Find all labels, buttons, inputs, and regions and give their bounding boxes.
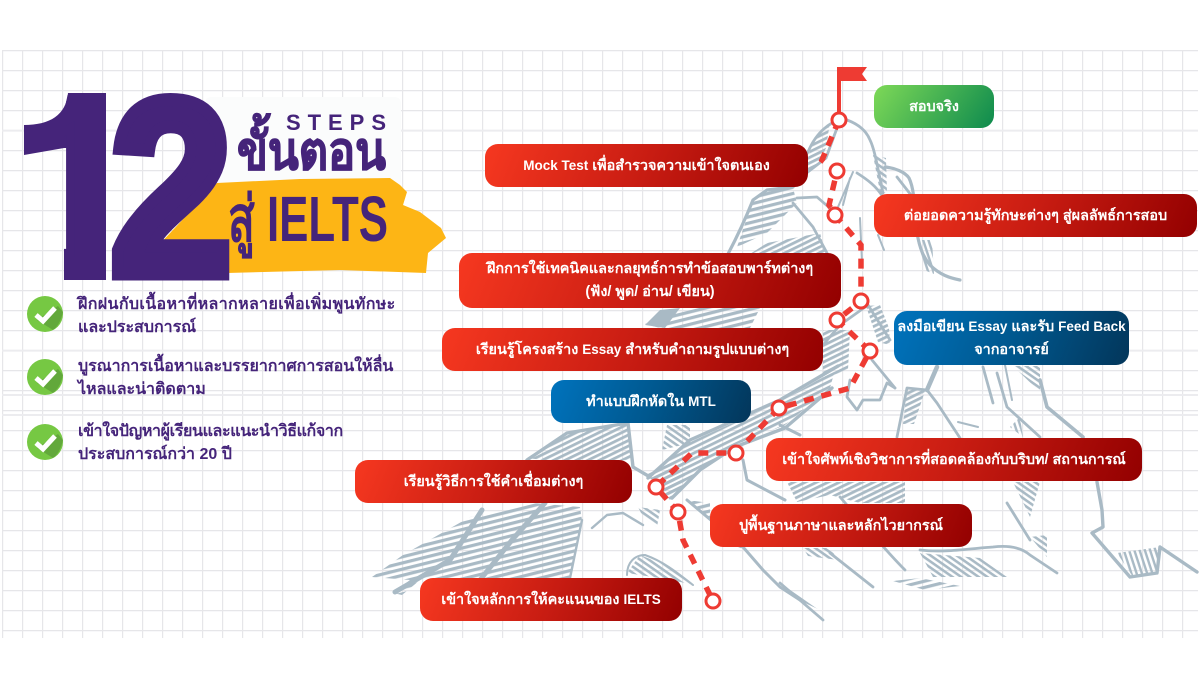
step 11 pill bbox=[485, 144, 808, 187]
title panel background bbox=[205, 97, 401, 187]
step 9 pill bbox=[459, 253, 841, 308]
bullet text 2: ไหลและน่าติดตาม bbox=[78, 381, 206, 398]
title word: STEPS: STEPS bbox=[286, 110, 386, 135]
step 2 pill bbox=[420, 578, 682, 621]
bullet text 3: เข้าใจปัญหาผู้เรียนและแนะนำวิธีแก้จาก bbox=[78, 423, 343, 440]
mountain illustration bbox=[372, 120, 1197, 620]
step 11 pill: Mock Test เพื่อสำรวจความเข้าใจตนเอง bbox=[523, 158, 770, 174]
bullet text 2: บูรณาการเนื้อหาและบรรยากาศการสอนให้ลื่น bbox=[78, 358, 393, 375]
icon: check 2 bbox=[27, 359, 63, 395]
flag bbox=[837, 67, 867, 120]
route waypoints bbox=[649, 113, 877, 608]
title number 12: 1 bbox=[8, 40, 156, 337]
bullet text 1 bbox=[76, 292, 396, 336]
step 9 pill: (ฟัง/ พูด/ อ่าน/ เขียน) bbox=[585, 284, 715, 300]
bullet text 2 bbox=[76, 354, 394, 398]
step 5 pill bbox=[766, 438, 1142, 481]
step 8 pill bbox=[442, 328, 823, 371]
step 8 pill: เรียนรู้โครงสร้าง Essay สำหรับคำถามรูปแบบต่างๆ bbox=[476, 342, 789, 358]
step 12 pill bbox=[874, 85, 994, 128]
step 5 pill: เข้าใจศัพท์เชิงวิชาการที่สอดคล้องกับบริบท/ สถานการณ์ bbox=[782, 452, 1126, 468]
bullet text 3: ประสบการณ์กว่า 20 ปี bbox=[78, 446, 232, 463]
step 3 pill: ปูพื้นฐานภาษาและหลักไวยากรณ์ bbox=[739, 518, 943, 534]
climbing route bbox=[649, 67, 877, 608]
step 12 pill: สอบจริง bbox=[909, 98, 959, 114]
step 4 pill: เรียนรู้วิธีการใช้คำเชื่อมต่างๆ bbox=[404, 474, 583, 490]
bullet text 1: ฝึกฝนกับเนื้อหาที่หลากหลายเพื่อเพิ่มพูนทักษะ bbox=[78, 296, 396, 313]
step 3 pill bbox=[710, 504, 972, 547]
title number 12 bbox=[24, 93, 230, 280]
step 10 pill bbox=[874, 194, 1197, 237]
title word: Thai steps: ขั้นตอน bbox=[237, 113, 386, 181]
title word: to IELTS: สู่ IELTS bbox=[228, 183, 388, 259]
step 7 pill: จากอาจารย์ bbox=[974, 342, 1049, 358]
bullet text 1: และประสบการณ์ bbox=[78, 319, 196, 336]
title number 12: 2 bbox=[110, 48, 232, 327]
step 10 pill: ต่อยอดความรู้ทักษะต่างๆ สู่ผลลัพธ์การสอบ bbox=[904, 208, 1167, 224]
icon: check 1 bbox=[27, 296, 63, 332]
step 7 pill bbox=[894, 311, 1129, 365]
step 4 pill bbox=[355, 460, 632, 503]
step 6 pill: ทำแบบฝึกหัดใน MTL bbox=[586, 394, 716, 410]
step 6 pill bbox=[551, 380, 751, 423]
step 7 pill: ลงมือเขียน Essay และรับ Feed Back bbox=[897, 319, 1126, 335]
bullet text 3 bbox=[78, 421, 343, 463]
step 9 pill: ฝึกการใช้เทคนิคและกลยุทธ์การทำข้อสอบพาร์ทต่างๆ bbox=[487, 261, 813, 277]
step 2 pill: เข้าใจหลักการให้คะแนนของ IELTS bbox=[441, 592, 661, 608]
yellow brush stroke bbox=[157, 178, 446, 273]
icon: check 3 bbox=[27, 424, 63, 460]
